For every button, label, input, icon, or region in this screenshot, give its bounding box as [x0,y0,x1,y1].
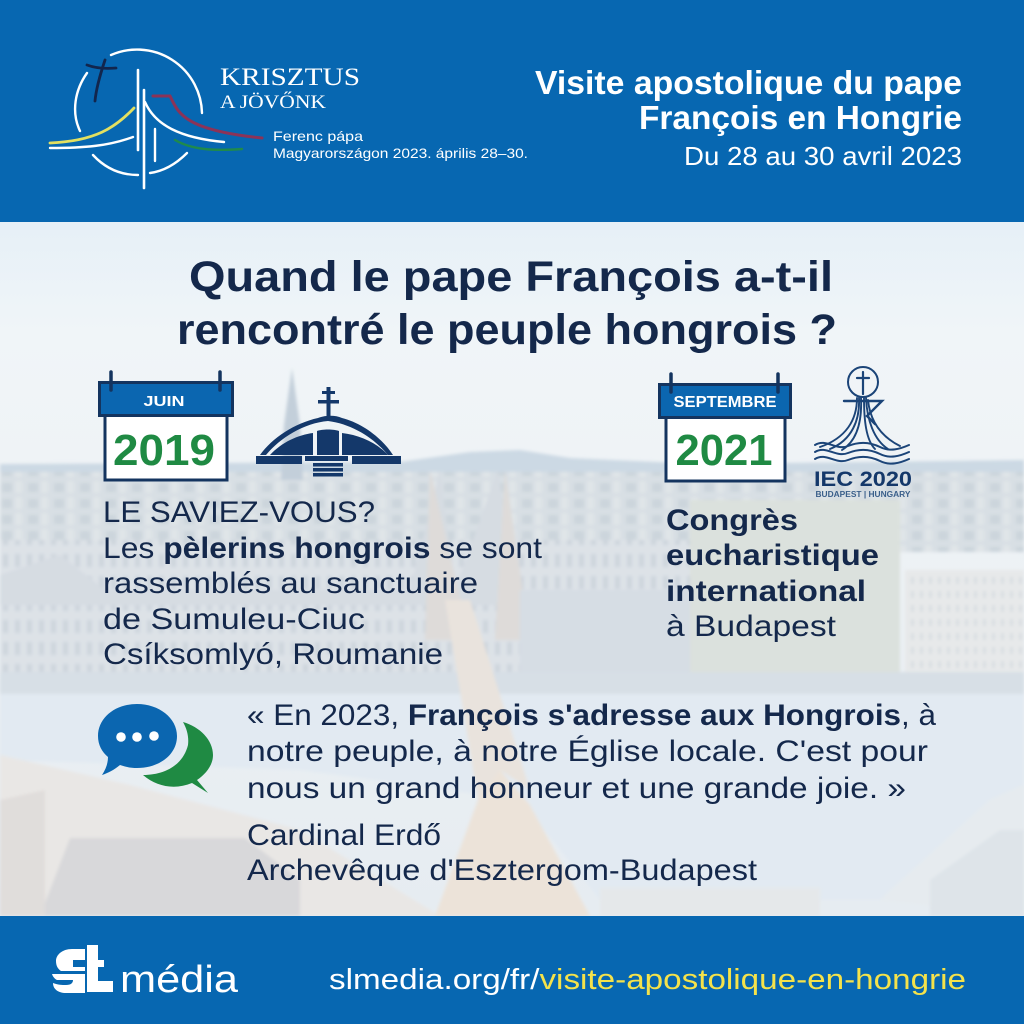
header title: Visite apostolique du pape [535,64,962,101]
icon: speech bubbles [98,704,213,793]
text: le saviez-vous: Les pèlerins hongrois se sont [103,532,543,565]
icon: IEC 2020 logo: BUDAPEST | HUNGARY [816,490,911,499]
text: le saviez-vous [103,496,543,671]
icon: Csíksomlyó shrine [256,387,401,476]
logo: Krisztus a jövőnk: A JÖVŐNK [220,91,326,113]
logo: Krisztus a jövőnk: KRISZTUS [220,64,360,91]
calendar: septembre 2021 [660,374,790,481]
logo: Krisztus a jövőnk: Magyarországon 2023. április 28–30. [273,145,528,161]
quote text: nous un grand honneur et une grande joie. » [247,772,906,805]
header band [0,0,1024,222]
background: Budapest cityscape [0,222,1024,916]
text: le saviez-vous: de Sumuleu-Ciuc [103,603,365,636]
footer logo: SL média: média [120,959,239,1001]
quote text [247,699,936,805]
text: congrès eucharistique [666,504,879,643]
main heading [177,253,837,354]
calendar: juin 2019: 2019 [113,426,215,475]
attribution: Archevêque d'Esztergom-Budapest [247,854,758,887]
logo: Krisztus a jövőnk [50,50,528,188]
calendar: juin 2019: JUIN [144,393,184,410]
attribution: Cardinal Erdő [247,819,441,852]
logo: Krisztus a jövőnk: Ferenc pápa [273,128,363,144]
footer band [0,916,1024,1024]
text: le saviez-vous: LE SAVIEZ-VOUS? [103,496,375,529]
footer url: slmedia.org/fr/ visite-apostolique-en-hongrie [329,964,966,996]
attribution [247,819,758,887]
icon: IEC 2020 logo [814,367,912,499]
quote text: notre peuple, à notre Église locale. C'est pour [247,735,928,768]
header title [535,64,962,171]
header title: François en Hongrie [639,99,962,136]
footer logo: SL média [52,945,239,1001]
text: congrès eucharistique: eucharistique [666,539,879,572]
main heading: rencontré le peuple hongrois ? [177,306,837,354]
text: le saviez-vous: Csíksomlyó, Roumanie [103,638,443,671]
header title: Du 28 au 30 avril 2023 [684,141,962,171]
main heading: Quand le pape François a-t-il [189,253,833,301]
text: congrès eucharistique: international [666,575,866,608]
text: le saviez-vous: rassemblés au sanctuaire [103,567,478,600]
calendar: septembre 2021: 2021 [676,426,772,475]
icon: IEC 2020 logo: IEC 2020 [814,468,912,491]
text: congrès eucharistique: à Budapest [666,610,837,643]
quote text: « En 2023, François s'adresse aux Hongrois , à [247,699,936,732]
calendar: juin 2019 [100,372,232,480]
text: congrès eucharistique: Congrès [666,504,798,537]
calendar: septembre 2021: SEPTEMBRE [674,394,777,411]
